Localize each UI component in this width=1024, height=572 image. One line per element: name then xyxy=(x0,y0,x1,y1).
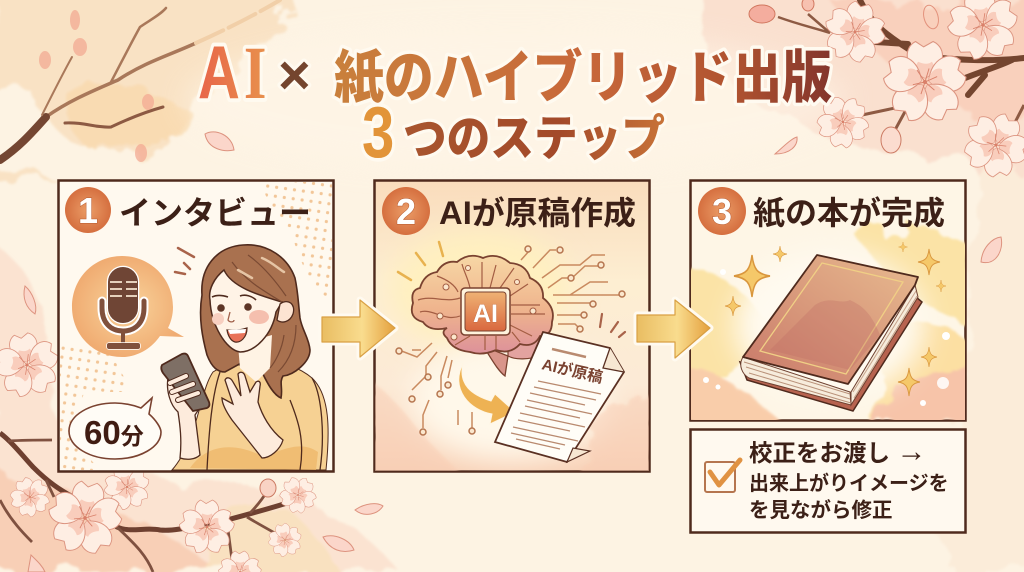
step 1 heading: インタビュー xyxy=(119,195,311,231)
document icon: AIが原稿 xyxy=(540,354,605,387)
step 3 heading: 紙の本が完成 xyxy=(753,195,945,231)
callout text xyxy=(749,435,949,522)
callout text: を見ながら修正 xyxy=(749,498,892,522)
illustration: woman with smartphone xyxy=(161,245,328,470)
step 1 badge: 1 xyxy=(78,190,98,231)
step 2 badge xyxy=(382,187,430,235)
arrow: step 2 to step 3 xyxy=(637,300,710,358)
title: つのステップ xyxy=(403,111,665,165)
halftone dots xyxy=(60,182,332,470)
step 3 badge xyxy=(698,187,746,235)
illustration: book xyxy=(740,255,922,411)
circuit lines xyxy=(396,246,625,435)
sparkles xyxy=(703,242,950,406)
60 minutes speech bubble: 60分 xyxy=(84,414,144,451)
title: AI xyxy=(198,31,270,115)
icon: microphone speech bubble xyxy=(72,256,184,357)
title: 紙のハイブリッド出版 xyxy=(334,46,832,110)
60 minutes speech bubble xyxy=(69,398,161,459)
decoration: cherry branch top left xyxy=(0,0,280,162)
decoration: falling petals xyxy=(24,132,1002,572)
icon: AI brain xyxy=(412,256,553,376)
panel: step 2 AI writes manuscript xyxy=(370,180,655,480)
icon: checkmark xyxy=(705,460,740,492)
step 3 badge: 3 xyxy=(712,191,732,232)
curved arrow to document xyxy=(459,363,515,424)
step 2 heading: AIが原稿作成 xyxy=(439,195,636,231)
title: 3 xyxy=(362,92,394,172)
emphasis marks xyxy=(600,314,625,337)
decoration: cherry branch and blossoms bottom left xyxy=(0,328,325,572)
panel: step 3 printed book xyxy=(680,180,975,430)
callout: proof check box xyxy=(690,430,966,532)
emphasis marks xyxy=(175,248,194,274)
decoration: cherry branch and blossoms top right xyxy=(749,0,1024,191)
callout text: 校正をお渡し → xyxy=(749,435,927,468)
title: × xyxy=(278,43,311,106)
callout text: 出来上がりイメージを xyxy=(749,471,949,495)
rays around brain xyxy=(398,242,443,280)
icon: AI brain: AI xyxy=(473,300,498,328)
document icon xyxy=(495,332,624,462)
panel: step 1 interview xyxy=(58,180,334,472)
title xyxy=(198,31,832,172)
arrow: step 1 to step 2 xyxy=(322,300,395,357)
step 1 badge xyxy=(65,187,111,233)
step 2 badge: 2 xyxy=(396,191,416,232)
